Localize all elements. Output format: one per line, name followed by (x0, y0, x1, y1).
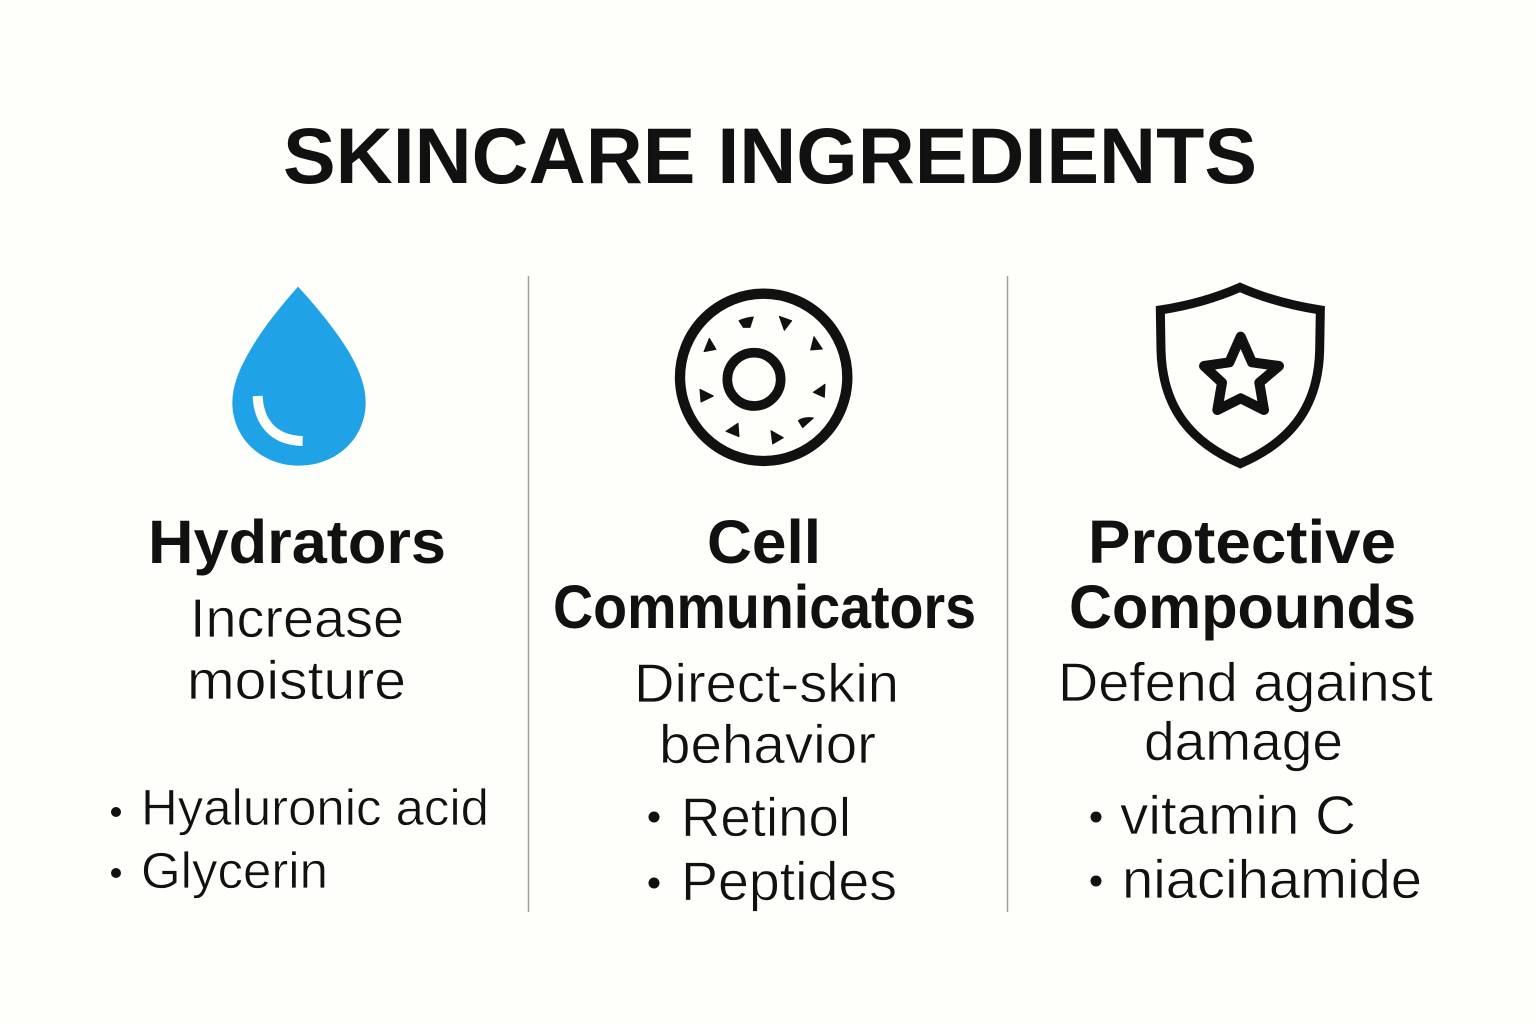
ingredient list: protective compounds: niacihamide (1122, 848, 1422, 910)
ingredient list: cell communicators: Retinol (681, 786, 851, 848)
description: protective compounds: Defend against (1058, 651, 1433, 713)
heading: cell communicators: Communicators (553, 573, 976, 641)
heading: hydrators: Hydrators (148, 508, 446, 576)
description: cell communicators: behavior (659, 713, 876, 775)
description: protective compounds (1058, 651, 1433, 772)
icon: shield with star (1160, 287, 1320, 464)
heading: protective compounds: Compounds (1069, 573, 1416, 641)
ingredient list: hydrators: Hyaluronic acid (141, 779, 489, 836)
heading: cell communicators (553, 508, 976, 641)
description: hydrators: Increase (190, 587, 404, 649)
panel: protective compounds (1058, 287, 1433, 910)
icon: water drop (232, 287, 366, 466)
heading: cell communicators: Cell (707, 508, 821, 576)
ingredient list: cell communicators: Peptides (681, 850, 897, 912)
icon: cell (680, 294, 847, 461)
description: protective compounds: damage (1144, 710, 1343, 772)
title: SKINCARE INGREDIENTS (283, 111, 1257, 200)
ingredient list: hydrators (111, 779, 489, 899)
heading: protective compounds: Protective (1088, 508, 1396, 576)
description: hydrators: moisture (187, 649, 406, 711)
panel: cell communicators (553, 294, 976, 912)
ingredient list: cell communicators (648, 786, 897, 912)
ingredient list: protective compounds: vitamin C (1120, 784, 1356, 846)
ingredient list: protective compounds (1090, 784, 1422, 910)
ingredient list: hydrators: Glycerin (141, 842, 328, 899)
description: cell communicators: Direct-skin (634, 652, 899, 714)
heading: protective compounds (1069, 508, 1416, 641)
description: cell communicators (634, 652, 899, 775)
description: hydrators (187, 587, 406, 711)
panel: hydrators (111, 287, 489, 899)
